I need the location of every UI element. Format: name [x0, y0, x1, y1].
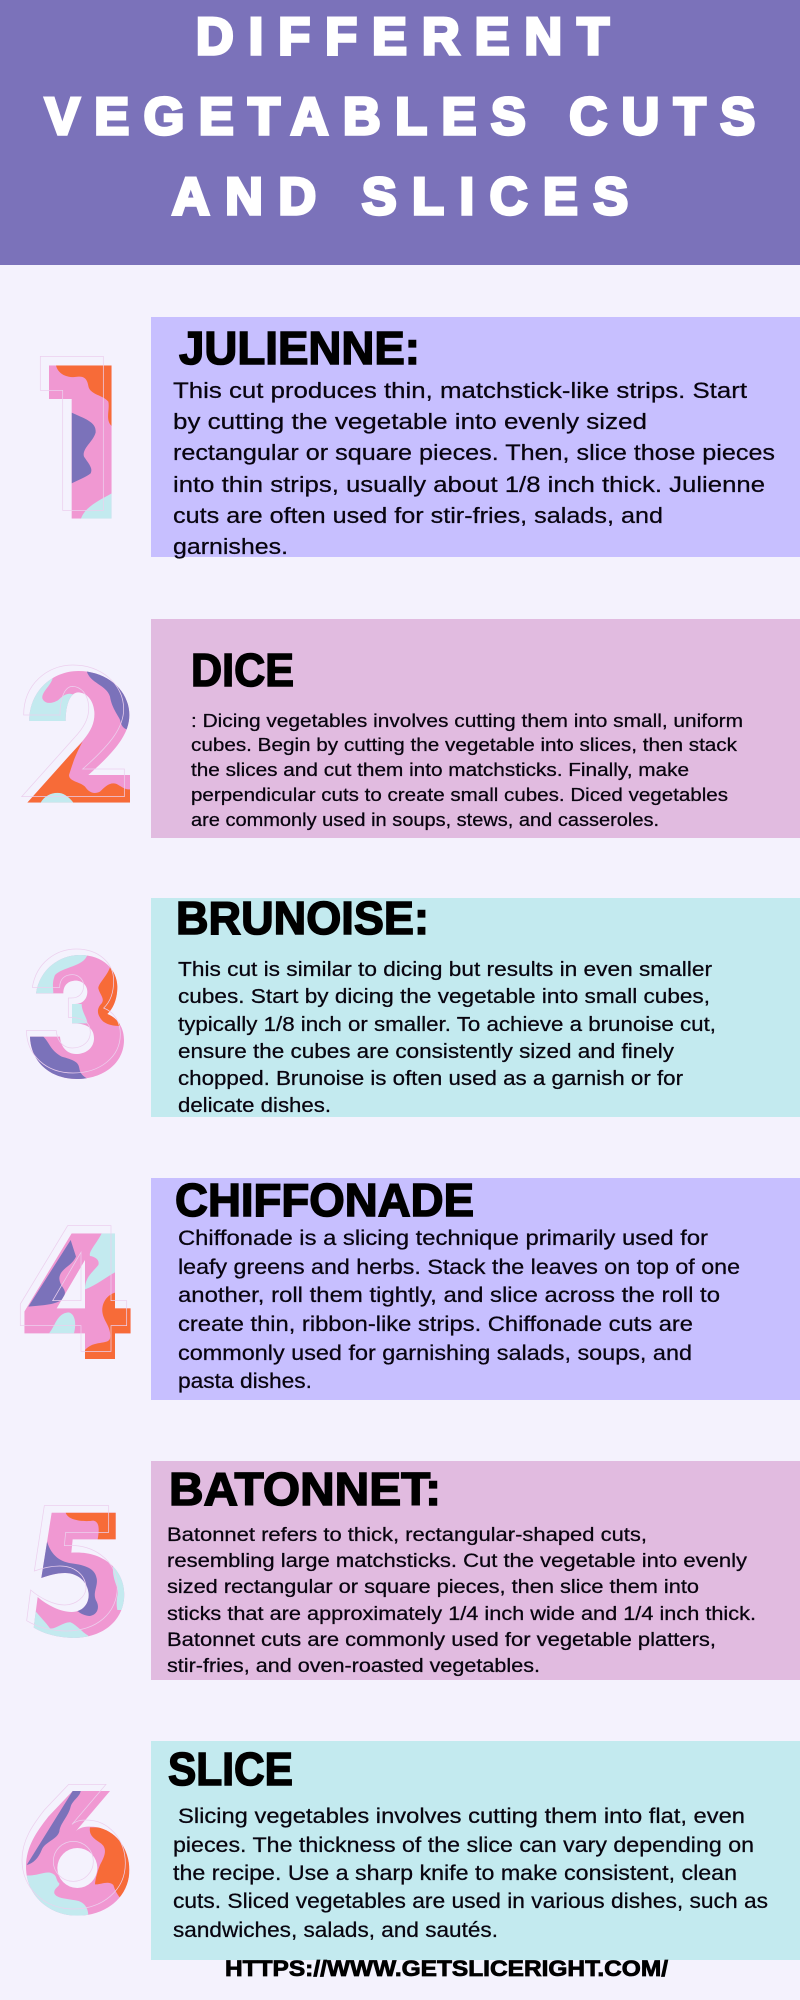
- icon: number 5: [27, 1506, 130, 1643]
- body text: julienne: cuts are often used for stir-fries, salads, and: [173, 503, 663, 528]
- body text: chiffonade: Chiffonade is a slicing technique primarily used for: [178, 1227, 708, 1250]
- body text: slice: the recipe. Use a sharp knife to make consistent, clean: [173, 1862, 737, 1885]
- heading: batonnet: BATONNET:: [169, 1463, 441, 1515]
- icon: number 2: [20, 665, 137, 807]
- heading: julienne: JULIENNE:: [179, 322, 420, 374]
- icon: number 1: [40, 356, 112, 518]
- body text: slice: [173, 1805, 768, 1942]
- body text: brunoise: ensure the cubes are consistently sized and finely: [178, 1041, 674, 1063]
- body text: chiffonade: create thin, ribbon-like strips. Chiffonade cuts are: [178, 1313, 693, 1336]
- icon: number 4: [20, 1226, 137, 1363]
- body text: chiffonade: another, roll them tightly, and slice across the roll to: [178, 1284, 720, 1307]
- body text: dice: the slices and cut them into matchsticks. Finally, make: [191, 760, 689, 780]
- title text: DIFFERENT: [196, 8, 609, 66]
- body text: julienne: [173, 378, 775, 559]
- body text: batonnet: stir-fries, and oven-roasted vegetables.: [167, 1656, 540, 1677]
- heading: slice: SLICE: [168, 1743, 293, 1795]
- icon: number 6: [20, 1784, 133, 1920]
- body text: julienne: This cut produces thin, matchstick-like strips. Start: [173, 378, 748, 403]
- body text: dice: cubes. Begin by cutting the vegetable into slices, then stack: [191, 735, 738, 755]
- body text: dice: : Dicing vegetables involves cutting them into small, uniform: [191, 711, 743, 731]
- body text: batonnet: sized rectangular or square pieces, then slice them into: [167, 1577, 699, 1598]
- body text: chiffonade: leafy greens and herbs. Stack the leaves on top of one: [178, 1256, 740, 1279]
- title text: [45, 8, 755, 226]
- body text: dice: perpendicular cuts to create small cubes. Diced vegetables: [191, 785, 728, 805]
- body text: batonnet: [167, 1525, 756, 1677]
- footer url: HTTPS://WWW.GETSLICERIGHT.COM/: [225, 1956, 668, 1981]
- panel: julienne: [151, 317, 800, 559]
- heading: brunoise: BRUNOISE:: [176, 892, 429, 944]
- panel: dice: [151, 619, 800, 838]
- heading: chiffonade: CHIFFONADE: [175, 1174, 474, 1226]
- body text: slice: pieces. The thickness of the slice can vary depending on: [173, 1834, 754, 1857]
- body text: batonnet: resembling large matchsticks. Cut the vegetable into evenly: [167, 1551, 748, 1572]
- panel: chiffonade: [151, 1174, 800, 1400]
- body text: batonnet: sticks that are approximately 1/4 inch wide and 1/4 inch thick.: [167, 1604, 756, 1625]
- body text: slice: cuts. Sliced vegetables are used in various dishes, such as: [173, 1890, 768, 1913]
- body text: batonnet: Batonnet cuts are commonly used for vegetable platters,: [167, 1630, 716, 1651]
- body text: chiffonade: [178, 1227, 740, 1393]
- body text: dice: are commonly used in soups, stews, and casseroles.: [191, 810, 659, 830]
- body text: chiffonade: commonly used for garnishing salads, soups, and: [178, 1342, 692, 1365]
- title text: VEGETABLES CUTS: [45, 88, 755, 146]
- panel: brunoise: [151, 892, 800, 1117]
- body text: slice: sandwiches, salads, and sautés.: [173, 1919, 498, 1942]
- panel: batonnet: [151, 1461, 800, 1680]
- panel: slice: [151, 1741, 800, 1960]
- body text: julienne: rectangular or square pieces. Then, slice those pieces: [173, 440, 775, 465]
- body text: chiffonade: pasta dishes.: [178, 1370, 312, 1393]
- body text: brunoise: cubes. Start by dicing the vegetable into small cubes,: [178, 986, 710, 1008]
- body text: batonnet: Batonnet refers to thick, rectangular-shaped cuts,: [167, 1525, 647, 1546]
- body text: brunoise: typically 1/8 inch or smaller. To achieve a brunoise cut,: [178, 1014, 716, 1036]
- body text: julienne: by cutting the vegetable into evenly sized: [173, 409, 647, 434]
- body text: dice: [191, 711, 743, 830]
- body text: slice: Slicing vegetables involves cutting them into flat, even: [178, 1805, 745, 1828]
- body text: brunoise: [178, 959, 716, 1117]
- title banner: [0, 0, 800, 265]
- body text: brunoise: chopped. Brunoise is often used as a garnish or for: [178, 1068, 683, 1090]
- body text: julienne: into thin strips, usually about 1/8 inch thick. Julienne: [173, 472, 765, 497]
- heading: dice: DICE: [191, 644, 294, 696]
- title text: AND SLICES: [172, 168, 628, 226]
- icon: number 3: [26, 948, 124, 1079]
- body text: julienne: garnishes.: [173, 534, 288, 559]
- body text: brunoise: This cut is similar to dicing but results in even smaller: [178, 959, 712, 981]
- body text: brunoise: delicate dishes.: [178, 1095, 331, 1117]
